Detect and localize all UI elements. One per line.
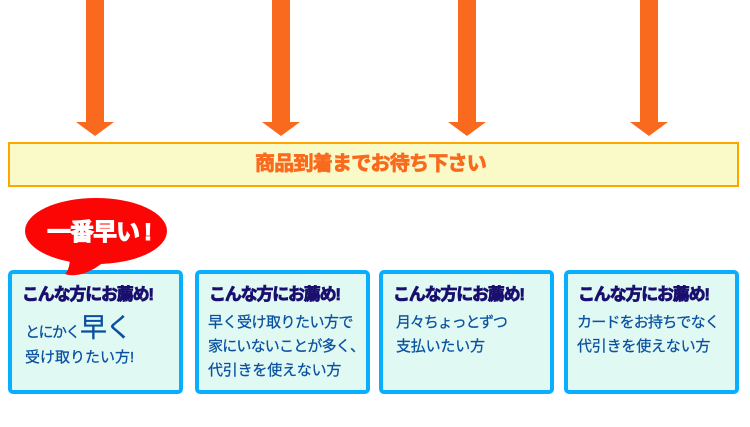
icon: arrow 1 xyxy=(76,0,114,136)
card 3 text block: 月々ちょっとずつ xyxy=(396,314,507,331)
callout: speech bubble xyxy=(25,198,167,276)
card 4 text block: 代引きを使えない方 xyxy=(577,338,710,355)
panel: card 1 xyxy=(8,270,183,394)
card 2 text block: 代引きを使えない方 xyxy=(208,362,341,379)
card 4 text block: カードをお持ちでなく xyxy=(577,314,719,331)
card 2 text block: 早く受け取りたい方で xyxy=(208,314,353,331)
card 3 text block: 支払いたい方 xyxy=(396,338,485,355)
icon: arrow 4 xyxy=(630,0,668,136)
card 4 heading: こんな方にお薦め! xyxy=(578,285,709,304)
icon: arrow 3 xyxy=(448,0,486,136)
banner xyxy=(8,142,739,187)
card 3 heading: こんな方にお薦め! xyxy=(393,285,524,304)
callout: speech bubble: 一番早い! xyxy=(47,219,151,246)
card 1 text with large word: とにかく早く xyxy=(25,313,131,343)
card 2 heading: こんな方にお薦め! xyxy=(209,285,340,304)
card 1 text line 2: 受け取りたい方! xyxy=(25,349,134,366)
card 3 text block xyxy=(396,314,507,355)
banner: 商品到着までお待ち下さい xyxy=(255,153,486,175)
card 2 text block xyxy=(208,314,364,379)
card 4 text block xyxy=(577,314,719,355)
card 2 text block: 家にいないことが多く、 xyxy=(208,338,364,355)
icon: arrow 2 xyxy=(262,0,300,136)
panel: card 3 xyxy=(379,270,554,394)
panel: card 2 xyxy=(195,270,370,394)
card 1 heading: こんな方にお薦め! xyxy=(22,285,153,304)
panel: card 4 xyxy=(564,270,739,394)
